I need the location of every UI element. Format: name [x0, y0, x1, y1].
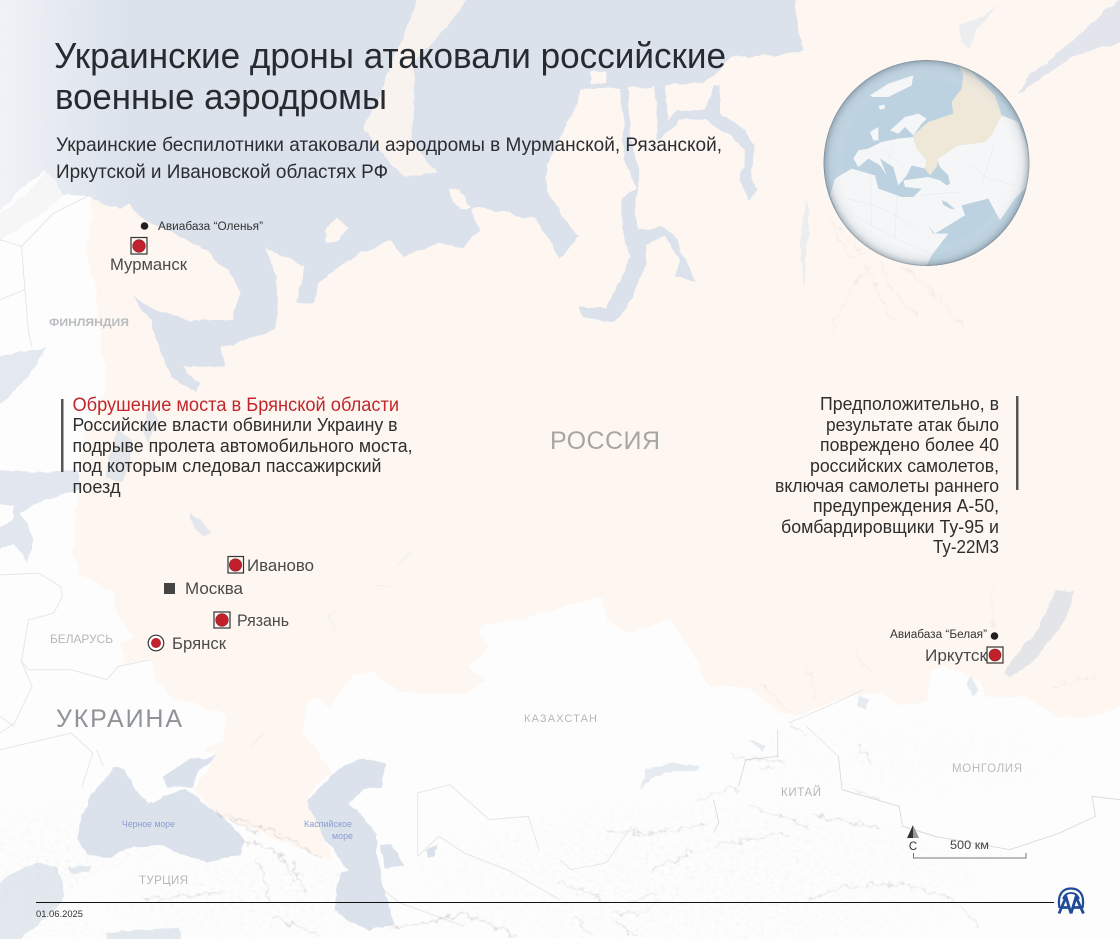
callout: damaged aircraft: включая самолеты раннего: [775, 476, 999, 496]
scale bar: [914, 840, 1026, 858]
logo: AA: [1059, 888, 1084, 914]
terrain texture: [66, 862, 757, 894]
Scandinavia shading: [0, 172, 65, 245]
north arrow: С: [909, 841, 917, 853]
title: военные аэродромы: [55, 76, 387, 117]
callout: damaged aircraft: повреждено более 40: [820, 435, 999, 455]
label: Ukraine: УКРАИНА: [56, 705, 182, 733]
title: Украинские дроны атаковали российские: [54, 35, 726, 76]
label: Black Sea: Черное море: [122, 819, 175, 830]
internal borders and rivers: [0, 550, 560, 926]
Crimea: [135, 775, 183, 803]
callout: damaged aircraft: Ту-22М3: [933, 537, 999, 557]
callout text: Российские власти обвинили Украину в: [72, 415, 398, 435]
Taz gulf: [655, 85, 757, 200]
lakes: [106, 405, 212, 538]
callout: damaged aircraft: предупреждения А-50,: [813, 496, 999, 516]
title: [54, 35, 726, 117]
label: Caspian Sea: [304, 819, 353, 842]
marker: Moscow: Москва: [185, 579, 244, 598]
label: Mongolia: МОНГОЛИЯ: [952, 763, 1022, 775]
label: Finland: ФИНЛЯНДИЯ: [49, 317, 129, 329]
marker: Murmansk: Мурманск: [110, 256, 188, 274]
callout: damaged aircraft: российских самолетов,: [810, 456, 999, 476]
Caspian Sea: [307, 758, 395, 930]
label: China: КИТАЙ: [781, 786, 821, 799]
globe: land: [830, 169, 948, 269]
marker: Murmansk: [110, 238, 188, 274]
marker: Ryazan: [214, 611, 289, 630]
globe: borders: [847, 142, 1015, 252]
callout: damaged aircraft: результате атак было: [826, 415, 999, 435]
date: 01.06.2025: [36, 909, 83, 919]
callout text: подрыве пролета автомобильного моста,: [72, 436, 412, 456]
globe locator: [824, 60, 1032, 269]
marker: Ryazan: Рязань: [237, 611, 289, 630]
scale bar: 500 км: [950, 840, 989, 852]
sea: Barents and Kara: [0, 0, 803, 393]
callout: bridge collapse: [61, 395, 412, 497]
callout text: поезд: [72, 477, 121, 497]
footer rule: [36, 902, 1054, 903]
label: Belarus: БЕЛАРУСЬ: [50, 634, 113, 646]
callout: damaged aircraft: бомбардировщики Ту-95 и: [781, 517, 999, 537]
label: Turkey: ТУРЦИЯ: [139, 875, 188, 887]
marker: Ivanovo: Иваново: [247, 556, 314, 575]
Black Sea: [75, 768, 245, 862]
terrain lines: [143, 220, 1096, 939]
callout: damaged aircraft: [775, 394, 1018, 557]
globe: Russia: [913, 65, 1002, 175]
Baltic waters: [0, 347, 46, 410]
callout: damaged aircraft: Предположительно, в: [820, 394, 999, 414]
label: Russia: РОССИЯ: [550, 427, 660, 455]
marker: Irkutsk: Иркутск: [925, 646, 988, 665]
subtitle: [56, 134, 722, 183]
subtitle: Украинские беспилотники атаковали аэродромы в Мурманской, Рязанской,: [56, 134, 722, 156]
label: Caspian Sea: море: [332, 831, 353, 842]
marker: Bryansk: [148, 634, 227, 653]
callout text: [72, 415, 412, 497]
marker: Olenya airbase: Авиабаза “Оленья”: [158, 221, 263, 233]
callout heading: Обрушение моста в Брянской области: [72, 395, 399, 416]
subtitle: Иркутской и Ивановской областях РФ: [56, 161, 388, 183]
marker: Belaya airbase: Авиабаза “Белая”: [890, 629, 987, 641]
marker: Bryansk: Брянск: [172, 634, 227, 653]
callout text: под которым следовал пассажирский: [72, 456, 382, 476]
label: Kazakhstan: КАЗАХСТАН: [524, 713, 597, 725]
label: Caspian Sea: Каспийское: [304, 819, 352, 830]
islands: [364, 0, 475, 177]
north arrow: [907, 825, 919, 853]
